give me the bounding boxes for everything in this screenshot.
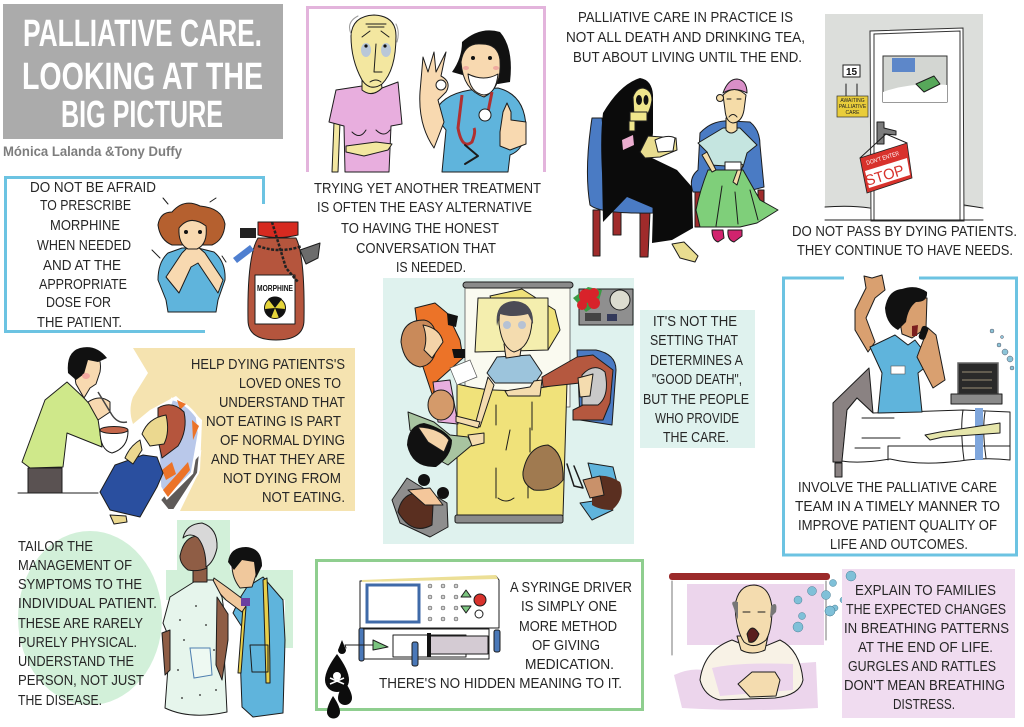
relative in orange — [401, 303, 465, 397]
panel: setting: WHO PROVIDE — [655, 411, 739, 427]
text: practice: NOT ALL DEATH AND DRINKING TEA, — [566, 30, 805, 46]
panel: setting: BUT THE PEOPLE — [643, 392, 749, 408]
text: breathing: GURGLES AND RATTLES — [848, 659, 996, 675]
stop sign: DON'T ENTER — [866, 151, 901, 167]
panel: feeding — [18, 347, 355, 524]
text: morphine: DO NOT BE AFRAID — [30, 180, 156, 196]
panel: bedside scene — [383, 278, 634, 544]
nurse from above — [567, 463, 622, 520]
text: morphine: TO PRESCRIBE — [40, 198, 131, 214]
title block: PALLIATIVE CARE. — [23, 13, 262, 55]
authors: Mónica Lalanda &Tony Duffy — [3, 143, 182, 159]
monitor — [951, 363, 1002, 404]
bedside table — [573, 287, 633, 325]
grim reaper — [601, 78, 698, 262]
text: breathing — [844, 583, 1009, 713]
text: breathing: IN BREATHING PATTERNS — [844, 621, 1009, 637]
text: team: IMPROVE PATIENT QUALITY OF — [798, 518, 997, 534]
text: tailor: THE DISEASE. — [18, 693, 102, 709]
text: tailor: TAILOR THE — [18, 539, 93, 555]
bubbles — [990, 329, 1014, 370]
text: morphine: DOSE FOR — [46, 295, 111, 311]
pink sheet — [674, 662, 818, 710]
text: treatment: IS NEEDED. — [396, 260, 466, 276]
text: practice: PALLIATIVE CARE IN PRACTICE IS — [578, 10, 793, 26]
text: feeding — [191, 357, 345, 506]
text: syringe: A SYRINGE DRIVER — [510, 580, 632, 596]
panel: treatment — [308, 8, 544, 172]
title block: BIG PICTURE — [61, 94, 223, 136]
room number — [843, 65, 860, 96]
morphine bottle: MORPHINE — [257, 284, 294, 293]
panel: morphine — [6, 178, 320, 340]
text: syringe: OF GIVING — [532, 638, 600, 654]
text: practice: BUT ABOUT LIVING UNTIL THE END. — [573, 50, 802, 66]
right chair — [691, 121, 764, 227]
door handle — [877, 122, 896, 144]
patient figure — [329, 15, 402, 172]
woman with dark hair — [407, 412, 484, 467]
nurse on phone — [855, 275, 945, 413]
panel: setting — [640, 310, 755, 448]
text: feeding: HELP DYING PATIENTS'S — [191, 357, 345, 373]
text: morphine: APPROPRIATE — [39, 277, 127, 293]
text: morphine — [30, 180, 156, 331]
morphine bottle — [233, 222, 320, 340]
child — [428, 380, 480, 428]
text: feeding: NOT EATING IS PART — [206, 414, 341, 430]
blue frame — [6, 178, 264, 332]
pink frame — [308, 8, 544, 172]
text: tailor: THESE ARE RARELY — [18, 616, 143, 632]
text: feeding: AND THAT THEY ARE — [211, 452, 345, 468]
teal background — [383, 278, 634, 544]
left chair — [587, 118, 653, 257]
stop sign — [860, 134, 912, 193]
text: team: INVOLVE THE PALLIATIVE CARE — [798, 480, 997, 496]
panel: syringe driver — [316, 560, 642, 719]
text: breathing: DISTRESS. — [893, 697, 955, 713]
text: syringe: THERE'S NO HIDDEN MEANING TO IT. — [379, 676, 622, 692]
text: feeding: NOT DYING FROM — [223, 471, 341, 487]
awaiting sign — [837, 96, 868, 117]
patient in gown — [162, 523, 228, 715]
door — [870, 28, 964, 221]
pink pillow — [687, 584, 824, 645]
green background blocks — [166, 520, 293, 648]
dying patient — [475, 301, 542, 427]
text: morphine: MORPHINE — [50, 218, 120, 234]
text: treatment: TO HAVING THE HONEST — [341, 221, 499, 237]
worried doctor — [152, 198, 226, 312]
text: team — [795, 480, 1000, 553]
measuring nurse — [212, 547, 285, 717]
green frame — [316, 560, 642, 710]
red bar — [669, 573, 830, 580]
dying man — [700, 585, 803, 700]
illustration: door — [825, 14, 983, 221]
dog — [523, 445, 563, 490]
panel: setting: "GOOD DEATH", — [652, 372, 742, 388]
text: syringe: MORE METHOD — [519, 619, 617, 635]
door window — [883, 56, 947, 102]
pillow — [475, 289, 560, 352]
awaiting sign: PALLIATIVE — [839, 104, 867, 110]
panel: setting: SETTING THAT — [650, 333, 738, 349]
text: syringe: IS SIMPLY ONE — [521, 599, 617, 615]
grey corridor — [825, 14, 983, 207]
text: tailor: MANAGEMENT OF — [18, 558, 132, 574]
panel: palliative care team — [784, 275, 1016, 555]
text: tailor: PERSON, NOT JUST — [18, 673, 144, 689]
doctor figure — [420, 30, 526, 172]
title block: LOOKING AT THE — [22, 56, 263, 98]
text: treatment: TRYING YET ANOTHER TREATMENT — [314, 181, 541, 197]
text: feeding: UNDERSTAND THAT — [219, 395, 345, 411]
text: tailor: PURELY PHYSICAL. — [18, 635, 137, 651]
text: breathing: AT THE END OF LIFE. — [858, 640, 993, 656]
text: morphine: WHEN NEEDED — [37, 238, 131, 254]
text: tailor: SYMPTOMS TO THE — [18, 577, 142, 593]
panel: tailor — [18, 520, 293, 717]
bubbles — [793, 572, 856, 632]
text: treatment: CONVERSATION THAT — [356, 241, 496, 257]
text: team: LIFE AND OUTCOMES. — [830, 537, 968, 553]
tan speech box — [130, 348, 355, 511]
panel: breathing — [669, 569, 1015, 718]
syringe driver device — [345, 575, 500, 666]
text: feeding: LOVED ONES TO — [239, 376, 341, 392]
blue frame — [784, 278, 1016, 555]
green circle — [18, 531, 162, 705]
flowers — [573, 287, 602, 312]
text: practice — [566, 10, 805, 66]
text: treatment: IS OFTEN THE EASY ALTERNATIVE — [317, 200, 532, 216]
panel: setting: THE CARE. — [663, 430, 729, 446]
text: morphine: AND AT THE — [43, 258, 121, 274]
text: tailor: UNDERSTAND THE — [18, 654, 134, 670]
card — [450, 360, 477, 385]
stop sign: STOP — [863, 162, 906, 190]
man in grey chair — [392, 474, 449, 537]
grandmother in chair — [542, 350, 616, 425]
patient in chair — [696, 79, 778, 242]
text: syringe: MEDICATION. — [525, 657, 614, 673]
relative feeding patient — [22, 347, 128, 493]
text: treatment — [314, 181, 541, 276]
text: do not pass by — [792, 224, 1017, 259]
text: morphine: THE PATIENT. — [37, 315, 122, 331]
panel: setting: DETERMINES A — [650, 353, 743, 369]
awaiting sign: AWAITING — [840, 98, 865, 104]
text: syringe — [379, 580, 632, 692]
room number: 15 — [846, 67, 858, 78]
text: team: TEAM IN A TIMELY MANNER TO — [795, 499, 1000, 515]
text: breathing: DON'T MEAN BREATHING — [844, 678, 1005, 694]
bed — [833, 368, 1010, 477]
bed — [455, 282, 573, 523]
poison drops — [325, 640, 352, 719]
skull symbol — [333, 672, 341, 680]
patient in reclining chair — [18, 399, 200, 524]
text: feeding: OF NORMAL DYING — [220, 433, 345, 449]
text: breathing: EXPLAIN TO FAMILIES — [855, 583, 996, 599]
text: tailor — [18, 539, 157, 709]
text: feeding: NOT EATING. — [262, 490, 345, 506]
title block — [3, 4, 283, 139]
illustration: death and patient with tea — [587, 78, 778, 262]
awaiting sign: CARE — [846, 110, 860, 116]
panel: setting: IT'S NOT THE — [653, 314, 737, 330]
text: tailor: INDIVIDUAL PATIENT. — [18, 596, 157, 612]
pink text box — [842, 569, 1015, 718]
